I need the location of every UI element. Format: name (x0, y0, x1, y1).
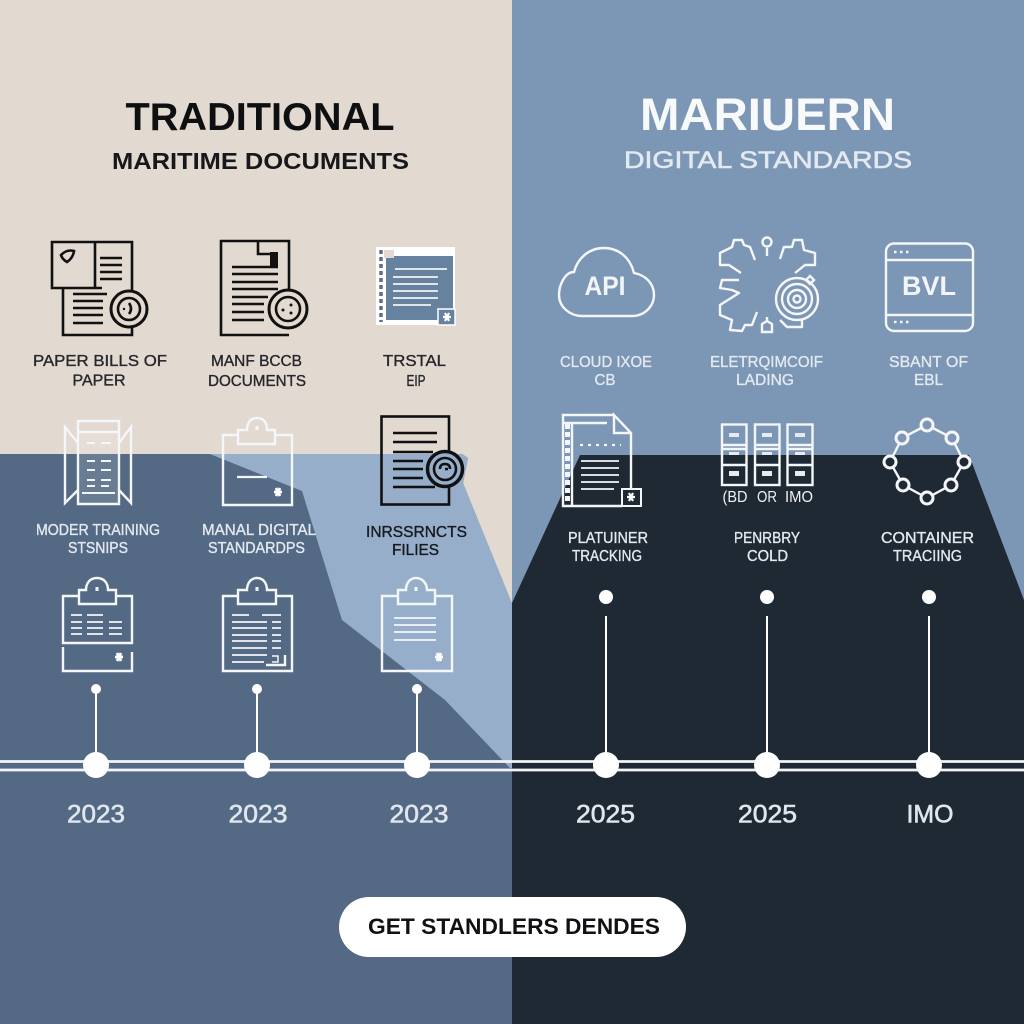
icon: folded sheet (65, 421, 131, 504)
timeline years: 2025 (576, 800, 635, 828)
label: insurance files (366, 524, 467, 559)
label: manifest documents (208, 353, 306, 390)
label: cloud: CB (594, 372, 616, 389)
panel: light blue facet (210, 454, 512, 768)
icon: container stacks (722, 424, 813, 506)
label: electronic (710, 354, 823, 389)
label: manifest documents: MANF BCCB (211, 353, 302, 370)
label: electronic: LADING (736, 372, 794, 389)
label: moder training: MODER TRAINING (36, 522, 160, 539)
icon: clipboard one (223, 418, 292, 505)
label: trstal (383, 353, 446, 390)
timeline years: 2023 (67, 800, 125, 828)
icon: container stacks: OR (757, 489, 777, 506)
label: moder training (36, 522, 160, 557)
icon: insurance document (382, 416, 462, 504)
label: container tracing: CONTAINER (881, 530, 974, 547)
label: paper bills (33, 353, 167, 390)
heading: traditional: TRADITIONAL (126, 96, 394, 139)
icon: clipboard table (63, 578, 132, 671)
label: insurance files: INRSSRNCTS (366, 524, 467, 541)
label: cloud: CLOUD IXOE (560, 354, 652, 371)
label: sbant: SBANT OF (889, 354, 968, 371)
label: platuiner tracking (568, 530, 648, 565)
label: penrbry cold (734, 530, 800, 565)
icon: container stacks: (BD (722, 489, 748, 506)
heading: modern: MARIUERN (640, 89, 895, 140)
panel: traditional background (0, 0, 512, 604)
icon: bvl window (886, 244, 973, 331)
label: trstal: EIP (406, 373, 426, 390)
label: manal digital: MANAL DIGITAL (202, 522, 316, 539)
heading: traditional (112, 96, 409, 174)
timeline years: IMO (906, 800, 954, 828)
label: trstal: TRSTAL (383, 353, 446, 370)
heading: traditional: MARITIME DOCUMENTS (112, 148, 409, 174)
icon: blue form (376, 247, 455, 325)
icon: manifest document (221, 241, 307, 335)
label: platuiner tracking: PLATUINER (568, 530, 648, 547)
label: moder training: STSNIPS (68, 540, 128, 557)
label: paper bills: PAPER BILLS OF (33, 353, 167, 370)
label: cloud (560, 354, 652, 389)
button: call to action (339, 897, 686, 957)
label: container tracing (881, 530, 974, 565)
label: paper bills: PAPER (72, 372, 126, 390)
timeline (0, 590, 1024, 778)
icon: container ring (884, 419, 970, 504)
label: manifest documents: DOCUMENTS (208, 373, 306, 390)
icon: electronic network seal (720, 238, 818, 332)
label: penrbry cold: PENRBRY (734, 530, 800, 547)
label: electronic: ELETRQIMCOIF (710, 354, 823, 371)
label: sbant (889, 354, 968, 389)
panel: modern background (512, 0, 1024, 620)
label: container tracing: TRACIING (893, 548, 962, 565)
icon: cloud api: API (584, 271, 626, 301)
icon: bvl window: BVL (902, 271, 956, 301)
button: call to action: GET STANDLERS DENDES (368, 914, 660, 939)
timeline years: 2023 (228, 800, 288, 828)
icon: cloud api (559, 248, 654, 316)
panel: lower right dark (512, 455, 1024, 1024)
timeline years: 2025 (738, 800, 797, 828)
panel: lower left slate (0, 454, 512, 1024)
label: manal digital (202, 522, 316, 557)
label: manal digital: STANDARDPS (208, 540, 305, 557)
icon: container stacks: IMO (785, 489, 813, 506)
timeline years: 2023 (390, 800, 448, 828)
icon: clipboard list (223, 578, 292, 671)
icon: paper bills (52, 242, 147, 335)
label: insurance files: FILIES (392, 542, 439, 559)
label: platuiner tracking: TRACKING (572, 548, 642, 565)
icon: platform document (563, 415, 641, 506)
heading: modern (624, 89, 912, 174)
label: sbant: EBL (914, 372, 943, 389)
timeline years (67, 800, 954, 828)
label: penrbry cold: COLD (747, 548, 788, 565)
heading: modern: DIGITAL STANDARDS (624, 147, 912, 174)
icon: clipboard notes (382, 578, 452, 671)
